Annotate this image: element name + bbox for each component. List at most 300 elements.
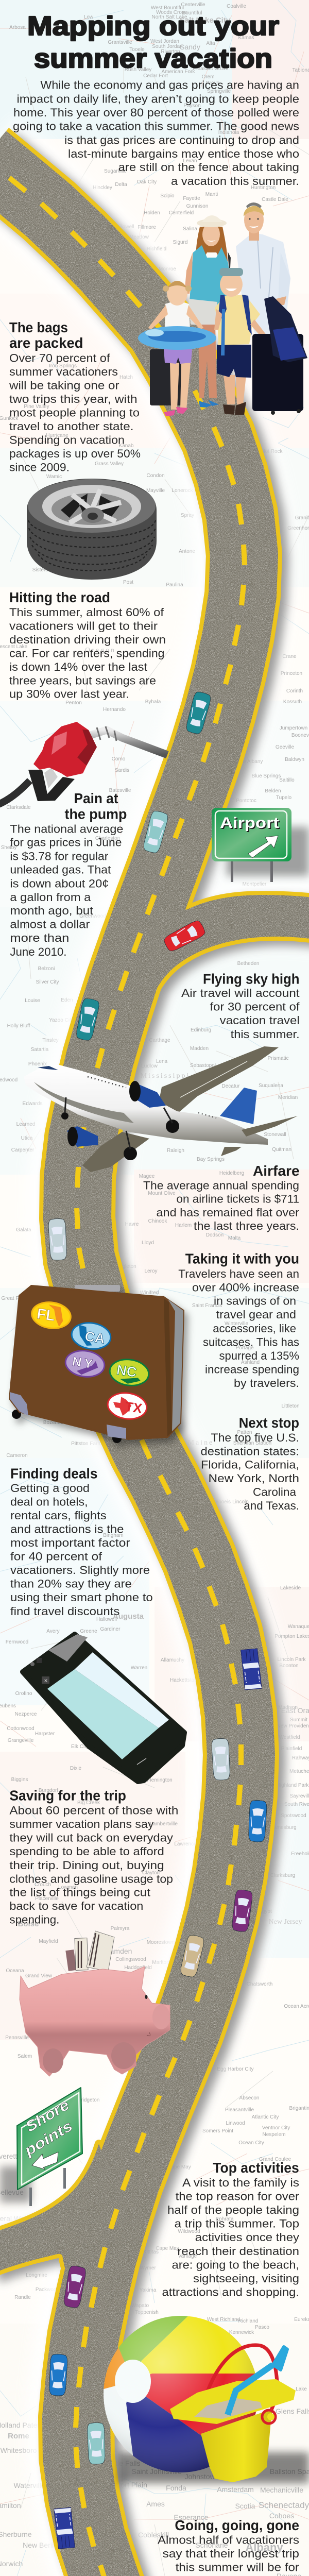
map place names: Ballston Spa	[270, 2467, 309, 2476]
map place names: Madison	[278, 1705, 298, 1710]
icon: gas pump nozzle	[0, 722, 167, 805]
map place names: Cobleskill	[138, 2531, 169, 2539]
map place names: Randle	[14, 2295, 31, 2300]
heading and text: pain at the pump	[10, 790, 127, 958]
map place names: Avery	[46, 1629, 60, 1634]
heading and text: the bags are packed: The bags	[9, 319, 68, 335]
map place names: Bozeman	[43, 1420, 65, 1426]
map place names: Paulina	[166, 582, 183, 588]
map place names: Payson	[183, 103, 201, 109]
heading and text: finding deals: Finding deals	[10, 1465, 98, 1481]
map place names: Portage	[235, 1345, 254, 1351]
road sign: shore points: Shore	[23, 2097, 72, 2136]
map place names: Belzoni	[38, 966, 55, 972]
sticker: TX: TX	[124, 1399, 144, 1416]
heading and text: pain at the pump: June 2010.	[10, 945, 66, 958]
map place names: Arbosa	[9, 25, 26, 30]
map place names: Sugarville	[104, 168, 127, 174]
map place names: Cohoes	[269, 2512, 294, 2520]
map place names: Corinth	[286, 688, 303, 694]
map place names: Ephrata	[215, 2216, 234, 2222]
map place names: Bay Springs	[197, 1157, 225, 1162]
heading and text: the bags are packed: will be taking one or	[9, 379, 119, 392]
car: teal lower	[75, 997, 100, 1042]
map place names: Meridian	[278, 1095, 298, 1100]
map place names: Johnstown	[185, 2472, 219, 2481]
car: blue on lower road	[48, 2354, 68, 2396]
map place names: Schenectady	[259, 2500, 309, 2510]
heading and text: taking it with you: in savings of on	[214, 1295, 296, 1308]
heading and text: top activities: attractions and shopping.	[162, 2285, 299, 2299]
map place names: Louise	[25, 998, 40, 1004]
heading and text: the bags are packed: two trips this year, with	[9, 393, 138, 405]
heading and text: finding deals: Getting a good	[10, 1482, 90, 1495]
map place names: Penton	[65, 700, 82, 706]
map place names: Chatsworth	[247, 1981, 272, 1987]
map place names: Pennsville	[5, 2035, 29, 2041]
title: summer vacation	[34, 44, 272, 74]
map place names: Montpelier	[243, 882, 267, 887]
map place names: Carpenter	[11, 1147, 35, 1153]
map place names: Little Falls	[108, 2459, 141, 2467]
map place names: Galata	[16, 1227, 31, 1233]
heading and text: top activities: Top activities	[213, 2160, 299, 2176]
map place names: Highland Park	[277, 1783, 309, 1788]
map place names: Iron Springs	[49, 363, 77, 369]
map place names: Pasco	[255, 2325, 269, 2330]
map place names: Mount Olive	[148, 1191, 176, 1196]
sticker: FL	[30, 1300, 73, 1331]
heading and text: taking it with you: suitcases. This has	[203, 1336, 299, 1349]
sticker: CA: CA	[84, 1328, 106, 1347]
heading and text: flying sky high: this summer.	[231, 1028, 300, 1041]
engine	[67, 1081, 166, 1147]
title	[27, 11, 279, 74]
map place names: Vantage	[178, 2253, 197, 2259]
map place names: Fort Plain	[116, 2481, 147, 2489]
map place names: Hernando	[103, 707, 126, 713]
intro text: are still on the fence about taking	[118, 161, 299, 174]
heading and text: saving for the trip: they will cut back on everyday	[9, 1832, 173, 1844]
heading and text: saving for the trip: clothes and gasoline usage top	[9, 1872, 173, 1885]
heading and text: the bags are packed: are packed	[9, 335, 83, 351]
map place names: Flemington	[147, 1777, 173, 1783]
map place names: Oregon	[85, 647, 116, 654]
heading and text: taking it with you: travel gear and	[216, 1308, 296, 1321]
map place names: Yakima	[140, 2287, 157, 2293]
heading and text: finding deals: vacationers. Slightly more	[10, 1564, 150, 1577]
map place names: Lincoln	[232, 1499, 249, 1505]
map place names: Cape May	[156, 2246, 179, 2251]
heading and text: hitting the road: vacationers will get to their	[9, 619, 158, 632]
map place names: Tupelo	[276, 795, 292, 801]
map place names: Crane	[282, 654, 297, 659]
heading and text: saving for the trip: spending.	[9, 1913, 59, 1926]
map place names: Fernwood	[6, 1639, 28, 1645]
map place names: Tinsley	[42, 1038, 59, 1043]
map place names: Meadow	[129, 234, 149, 240]
heading and text: next stop: destination states:	[201, 1445, 299, 1458]
map place names: Rome	[8, 2432, 29, 2441]
map place names: Wapato	[131, 2303, 149, 2309]
heading and text: top activities: reach their destination	[177, 2245, 299, 2258]
map place names: Scotia	[235, 2502, 255, 2510]
map place names: Saltillo	[279, 777, 295, 783]
map place names: Cedar Fort	[143, 73, 168, 79]
map place names: Coalville	[227, 4, 246, 9]
map place names: Mississippi	[141, 1072, 190, 1080]
map place names: Silver City	[36, 979, 59, 985]
map place names: Longmire	[26, 2273, 47, 2278]
heading and text: saving for the trip: back to save for vacation	[9, 1900, 143, 1912]
car: light teal	[142, 810, 169, 854]
heading and text: top activities: sightseeing, visiting	[193, 2272, 299, 2285]
map place names: Schoharie	[195, 2541, 228, 2549]
map place names: Fillmore	[138, 225, 156, 230]
heading and text: next stop: and Texas.	[244, 1499, 299, 1512]
map place names: Eden	[61, 997, 73, 1003]
sticker: CA	[70, 1320, 112, 1351]
map place names: Lloyd	[142, 1240, 154, 1246]
map place names: Flowell	[118, 224, 134, 230]
map place names: Collingswood	[115, 1957, 146, 1962]
map place names: Grand View	[25, 1973, 53, 1979]
heading and text: saving for the trip: the list of things being cut	[9, 1886, 150, 1899]
map place names: New Berlin	[23, 2541, 58, 2549]
map place names: Augusta	[113, 1612, 144, 1621]
map place names: Belden	[265, 788, 281, 794]
heading and text: airfare: and has remained flat over	[157, 1206, 299, 1219]
car: purple on lower road	[63, 2265, 87, 2309]
sticker: NC	[108, 1357, 150, 1388]
map place names: Salina	[183, 226, 197, 232]
map place names: American Fork	[161, 69, 196, 75]
fuselage	[24, 1065, 268, 1145]
map place names: Wamic	[46, 474, 62, 480]
icon: beach ball and bucket	[93, 2313, 309, 2483]
heading and text: next stop: Florida, California,	[201, 1458, 299, 1471]
heading and text: next stop: Carolina	[253, 1486, 297, 1498]
map place names: Orem	[202, 74, 214, 80]
map place names: Burgdorf	[39, 1788, 58, 1793]
map place names: New Albany	[236, 759, 263, 765]
heading and text: flying sky high: vacation travel	[220, 1014, 300, 1027]
heading and text: taking it with you: increase spending	[205, 1363, 299, 1376]
map place names: Byhala	[145, 699, 161, 705]
map place names: Lowman	[58, 1885, 78, 1890]
map place names: South Jordan	[152, 44, 183, 49]
map place names: Plainfield	[281, 1746, 302, 1752]
map place names: Atlantic City	[252, 2114, 279, 2120]
heading and text: pain at the pump: almost a dollar	[10, 918, 90, 930]
heading and text: taking it with you	[178, 1251, 299, 1389]
heading and text: pain at the pump: is $3.78 for regular	[10, 850, 108, 863]
heading and text: flying sky high: for 30 percent of	[210, 1001, 300, 1013]
heading and text: saving for the trip: Saving for the trip	[9, 1787, 126, 1803]
map place names: Batesville	[109, 788, 131, 793]
intro text: a vacation this summer.	[171, 175, 299, 188]
map place names: Pittston Farm	[71, 1441, 102, 1447]
icon: smartphone	[23, 1634, 184, 1782]
map place names: Gunnison	[186, 204, 208, 209]
map place names: Scipio	[160, 193, 175, 199]
map place names: Hackettstown	[170, 1677, 201, 1683]
map place names: Levan	[183, 158, 197, 164]
cars on the road	[48, 691, 267, 2576]
map place names: Greene	[80, 1629, 97, 1634]
map place names: Springville	[207, 89, 231, 94]
sticker: FL: FL	[36, 1306, 56, 1325]
car: silver	[48, 1218, 67, 1261]
heading and text: airfare: the last three years.	[194, 1219, 299, 1232]
map place names: Grantsville	[108, 40, 132, 45]
map place names: Mayfield	[39, 1939, 58, 1944]
map place names: Wymer	[140, 2265, 156, 2271]
heading and text: finding deals: most important factor	[10, 1536, 130, 1549]
heading and text: pain at the pump: a gallon from a	[10, 891, 91, 904]
map place names: Chinook	[148, 1218, 167, 1224]
road sign: airport	[212, 808, 309, 882]
heading and text: top activities: a trip this summer. Top	[175, 2217, 299, 2230]
road sign: airport: Airport	[221, 816, 280, 833]
heading and text: top activities: are: going to the beach,	[172, 2258, 299, 2271]
map place names: Oceana	[6, 1968, 24, 1974]
heading and text: finding deals: deal on hotels,	[10, 1495, 88, 1509]
heading and text: taking it with you: spurred a 135%	[219, 1349, 299, 1362]
icon: suitcase with state stickers	[10, 1285, 183, 1443]
sticker: NY: NY	[71, 1354, 96, 1372]
map place names: West Jordan	[150, 39, 179, 44]
girl	[138, 281, 216, 416]
map place names: Dixie	[70, 1766, 82, 1771]
map place names: Grass Valley	[95, 461, 124, 467]
map place names: Albany	[245, 2541, 283, 2554]
heading and text: pain at the pump: The national average	[10, 822, 123, 836]
tail fin	[220, 1088, 257, 1124]
map place names: Rush Valley	[125, 67, 151, 73]
map place names: Holden	[144, 210, 160, 216]
map place names: Centerfield	[169, 210, 194, 216]
car: navy SUV	[241, 1649, 262, 1690]
heading and text: taking it with you: accessories, like	[213, 1322, 296, 1335]
map place names: Bingham	[103, 1533, 124, 1538]
map place names: Maine	[188, 1439, 214, 1447]
map place names: Cottonwood	[7, 1726, 35, 1732]
boy	[214, 268, 270, 415]
map place names: Esperance	[174, 2513, 209, 2521]
map place names: Saint Johnsville	[131, 2467, 182, 2476]
map place names: Clarksburg	[270, 1873, 295, 1878]
map place names: Holly Bluff	[7, 1023, 30, 1029]
heading and text: flying sky high: Flying sky high	[203, 971, 300, 987]
map place names: Winterville	[225, 1321, 248, 1327]
map place names: Haddonfield	[124, 1965, 152, 1971]
map place names: Malta	[228, 1235, 241, 1241]
map place names: Littleton	[281, 1403, 300, 1409]
intro text: While the economy and gas prices are having an	[40, 79, 299, 92]
heading and text: going, going, gone: say that their longest trip	[163, 2547, 299, 2560]
map place names: Crouch	[35, 1882, 51, 1888]
heading and text: the bags are packed: most people planning to	[9, 406, 140, 419]
map place names: Lake	[296, 2386, 307, 2392]
map place names: Ocean City	[238, 2140, 264, 2146]
map place names: Amsterdam	[217, 2485, 254, 2494]
heading and text: hitting the road: is down 14% over the last	[9, 660, 147, 673]
heading and text: finding deals: and attractions is the	[10, 1523, 124, 1535]
heading and text: hitting the road: three years, but savings are	[9, 674, 156, 687]
heading and text: pain at the pump: for gas prices in June	[10, 836, 122, 849]
map place names: Biggins	[11, 1777, 28, 1783]
map place names: Grangeville	[8, 1738, 34, 1743]
map place names: Waterville	[14, 2481, 45, 2489]
heading and text: going, going, gone: this summer will be for	[176, 2561, 299, 2574]
map place names: Utica	[21, 1136, 33, 1141]
map place names: Mayville	[146, 488, 165, 494]
map place names: Hatch	[119, 375, 133, 380]
map place names: Boise	[18, 1920, 39, 1928]
map place names: Hinckley	[93, 185, 112, 191]
map place names: Winifred	[140, 1290, 159, 1296]
map place names: Alta	[206, 41, 215, 46]
map place names: Bridgeton	[78, 2097, 99, 2103]
heading and text: hitting the road: This summer, almost 60% of	[9, 606, 164, 619]
heading and text: the bags are packed: Spending on vacation	[9, 433, 125, 446]
map place names: Sandy	[180, 43, 200, 51]
map place names: Yazoo City	[49, 1018, 74, 1023]
map place names: Baldwyn	[285, 757, 304, 762]
car: teal	[185, 691, 212, 735]
map place names: Somers Point	[202, 2128, 233, 2134]
map place names: Clarksdale	[6, 805, 31, 810]
map place names: Sisters	[32, 567, 48, 573]
map place names: Como	[112, 756, 126, 762]
heading and text: pain at the pump: unleaded gas. That	[10, 863, 111, 876]
map place names: Gardiner	[100, 1626, 121, 1632]
map place names: Prismatic	[267, 1056, 289, 1061]
map place names: Manti	[205, 192, 218, 197]
heading and text: hitting the road: car. For car renters, spending	[9, 647, 165, 659]
map place names: Mechanicville	[260, 2486, 303, 2494]
map place names: Oak City	[137, 179, 157, 185]
map place names: Kittitas	[143, 2249, 159, 2255]
map place names: Clayton	[142, 1870, 160, 1876]
inner tube	[138, 326, 216, 350]
map place names: Orofino	[15, 1691, 32, 1697]
map place names: Packwood	[36, 2287, 59, 2293]
car: blue	[248, 1800, 267, 1842]
map place names: Delta	[115, 182, 127, 188]
map place names: Monroe	[159, 266, 176, 272]
pig body	[20, 1967, 170, 2076]
map place names: Stonewall	[264, 1132, 286, 1138]
map place names: Condon	[146, 473, 165, 479]
map place names: Linwood	[226, 2121, 245, 2126]
map place names: Grand Coulee	[259, 2157, 291, 2162]
map place names: Raleigh	[167, 1148, 184, 1154]
large black suitcase and flippers	[252, 296, 307, 415]
heading and text: pain at the pump: Pain at	[74, 790, 118, 806]
map place names: Boonton	[279, 1663, 299, 1669]
heading and text: top activities: A visit to the family is	[182, 2176, 299, 2189]
map place names: Centerville	[181, 2, 205, 8]
heading and text: going, going, gone	[158, 2517, 299, 2576]
map place names: Phoenix	[28, 1061, 47, 1067]
map place names: Charleston	[95, 836, 120, 841]
heading and text: airfare: Airfare	[253, 1163, 300, 1179]
heading and text: hitting the road: destination driving their own	[9, 633, 166, 646]
map place names: Satartia	[31, 1047, 49, 1053]
map place names: Lena	[156, 1059, 168, 1064]
heading and text: the bags are packed: Over 70 percent of	[9, 351, 110, 365]
heading and text: hitting the road	[9, 589, 166, 701]
car: tan	[179, 1934, 205, 1978]
heading and text: next stop: The top five U.S.	[211, 1431, 299, 1444]
landing gear	[61, 1097, 179, 1160]
map place names: Edwards	[23, 1101, 42, 1107]
map place names: Ashland	[241, 1360, 260, 1365]
map place names: Palmyra	[111, 1926, 130, 1931]
heading and text: going, going, gone: Almost half of vacationers	[158, 2534, 299, 2546]
heading and text: airfare: on airline tickets is $711	[176, 1192, 299, 1206]
car: navy SUV southbound	[54, 2507, 75, 2549]
map place names: Woods Cross	[156, 10, 187, 15]
map place names: Spotswood	[281, 1813, 306, 1819]
map place names: Marlton	[152, 1960, 169, 1965]
map place names: Kossuth	[283, 699, 302, 705]
bucket	[170, 2345, 296, 2482]
map place names: Richfield	[147, 246, 166, 252]
map place names: Greenwood	[79, 913, 106, 919]
map place names: Jamesburg	[271, 1825, 297, 1831]
map place names: Leroy	[144, 1268, 158, 1274]
map place names: Suqualena	[259, 1083, 283, 1089]
map place names: Whitesboro	[1, 2446, 37, 2454]
intro text: is that gas prices are continuing to drop and	[64, 133, 299, 146]
map place names: Post	[123, 580, 133, 585]
map place names: Elk City	[71, 1744, 89, 1750]
map place names: Provo	[206, 80, 219, 86]
map place names: Betheden	[237, 961, 259, 967]
heading and text: finding deals: find travel discounts	[10, 1605, 119, 1618]
icon: piggy bank with money	[20, 1931, 170, 2076]
road sign: airport: Airport	[220, 815, 279, 832]
map place names: West Bountiful	[151, 5, 184, 11]
heading and text: saving for the trip: their trip. Dining out, buying	[9, 1859, 164, 1872]
map place names: Lambertville	[150, 1821, 178, 1827]
heading and text: finding deals: rental cars, flights	[10, 1509, 107, 1522]
dad	[236, 202, 290, 340]
map place names: Sherman Station	[233, 1440, 271, 1446]
map place names: Pine Valley	[24, 404, 49, 410]
map place names: Lincoln Park	[277, 1657, 306, 1663]
map place names: Big Creek	[77, 1800, 100, 1806]
map place names: Patten	[237, 1430, 252, 1435]
map place names: New Jersey	[269, 1918, 302, 1926]
map place names: Shelby	[1, 845, 16, 851]
heading and text: flying sky high	[181, 971, 300, 1041]
map place names: Allamuchy	[161, 1657, 184, 1663]
heading and text: saving for the trip	[9, 1787, 178, 1926]
heading and text: top activities: activities once they	[195, 2231, 299, 2244]
map place names: Riverton	[161, 49, 180, 55]
map place names: Egypt	[259, 1909, 272, 1914]
map place names: Havre	[125, 1222, 139, 1227]
heading and text: pain at the pump: month ago, but	[10, 904, 93, 917]
map place names: Nezperce	[15, 1711, 37, 1717]
intro text: going to take a vacation this summer. The good news	[13, 120, 299, 133]
car: silver lower	[211, 1738, 231, 1781]
heading and text: the bags are packed: packages is up over 50%	[9, 447, 141, 460]
